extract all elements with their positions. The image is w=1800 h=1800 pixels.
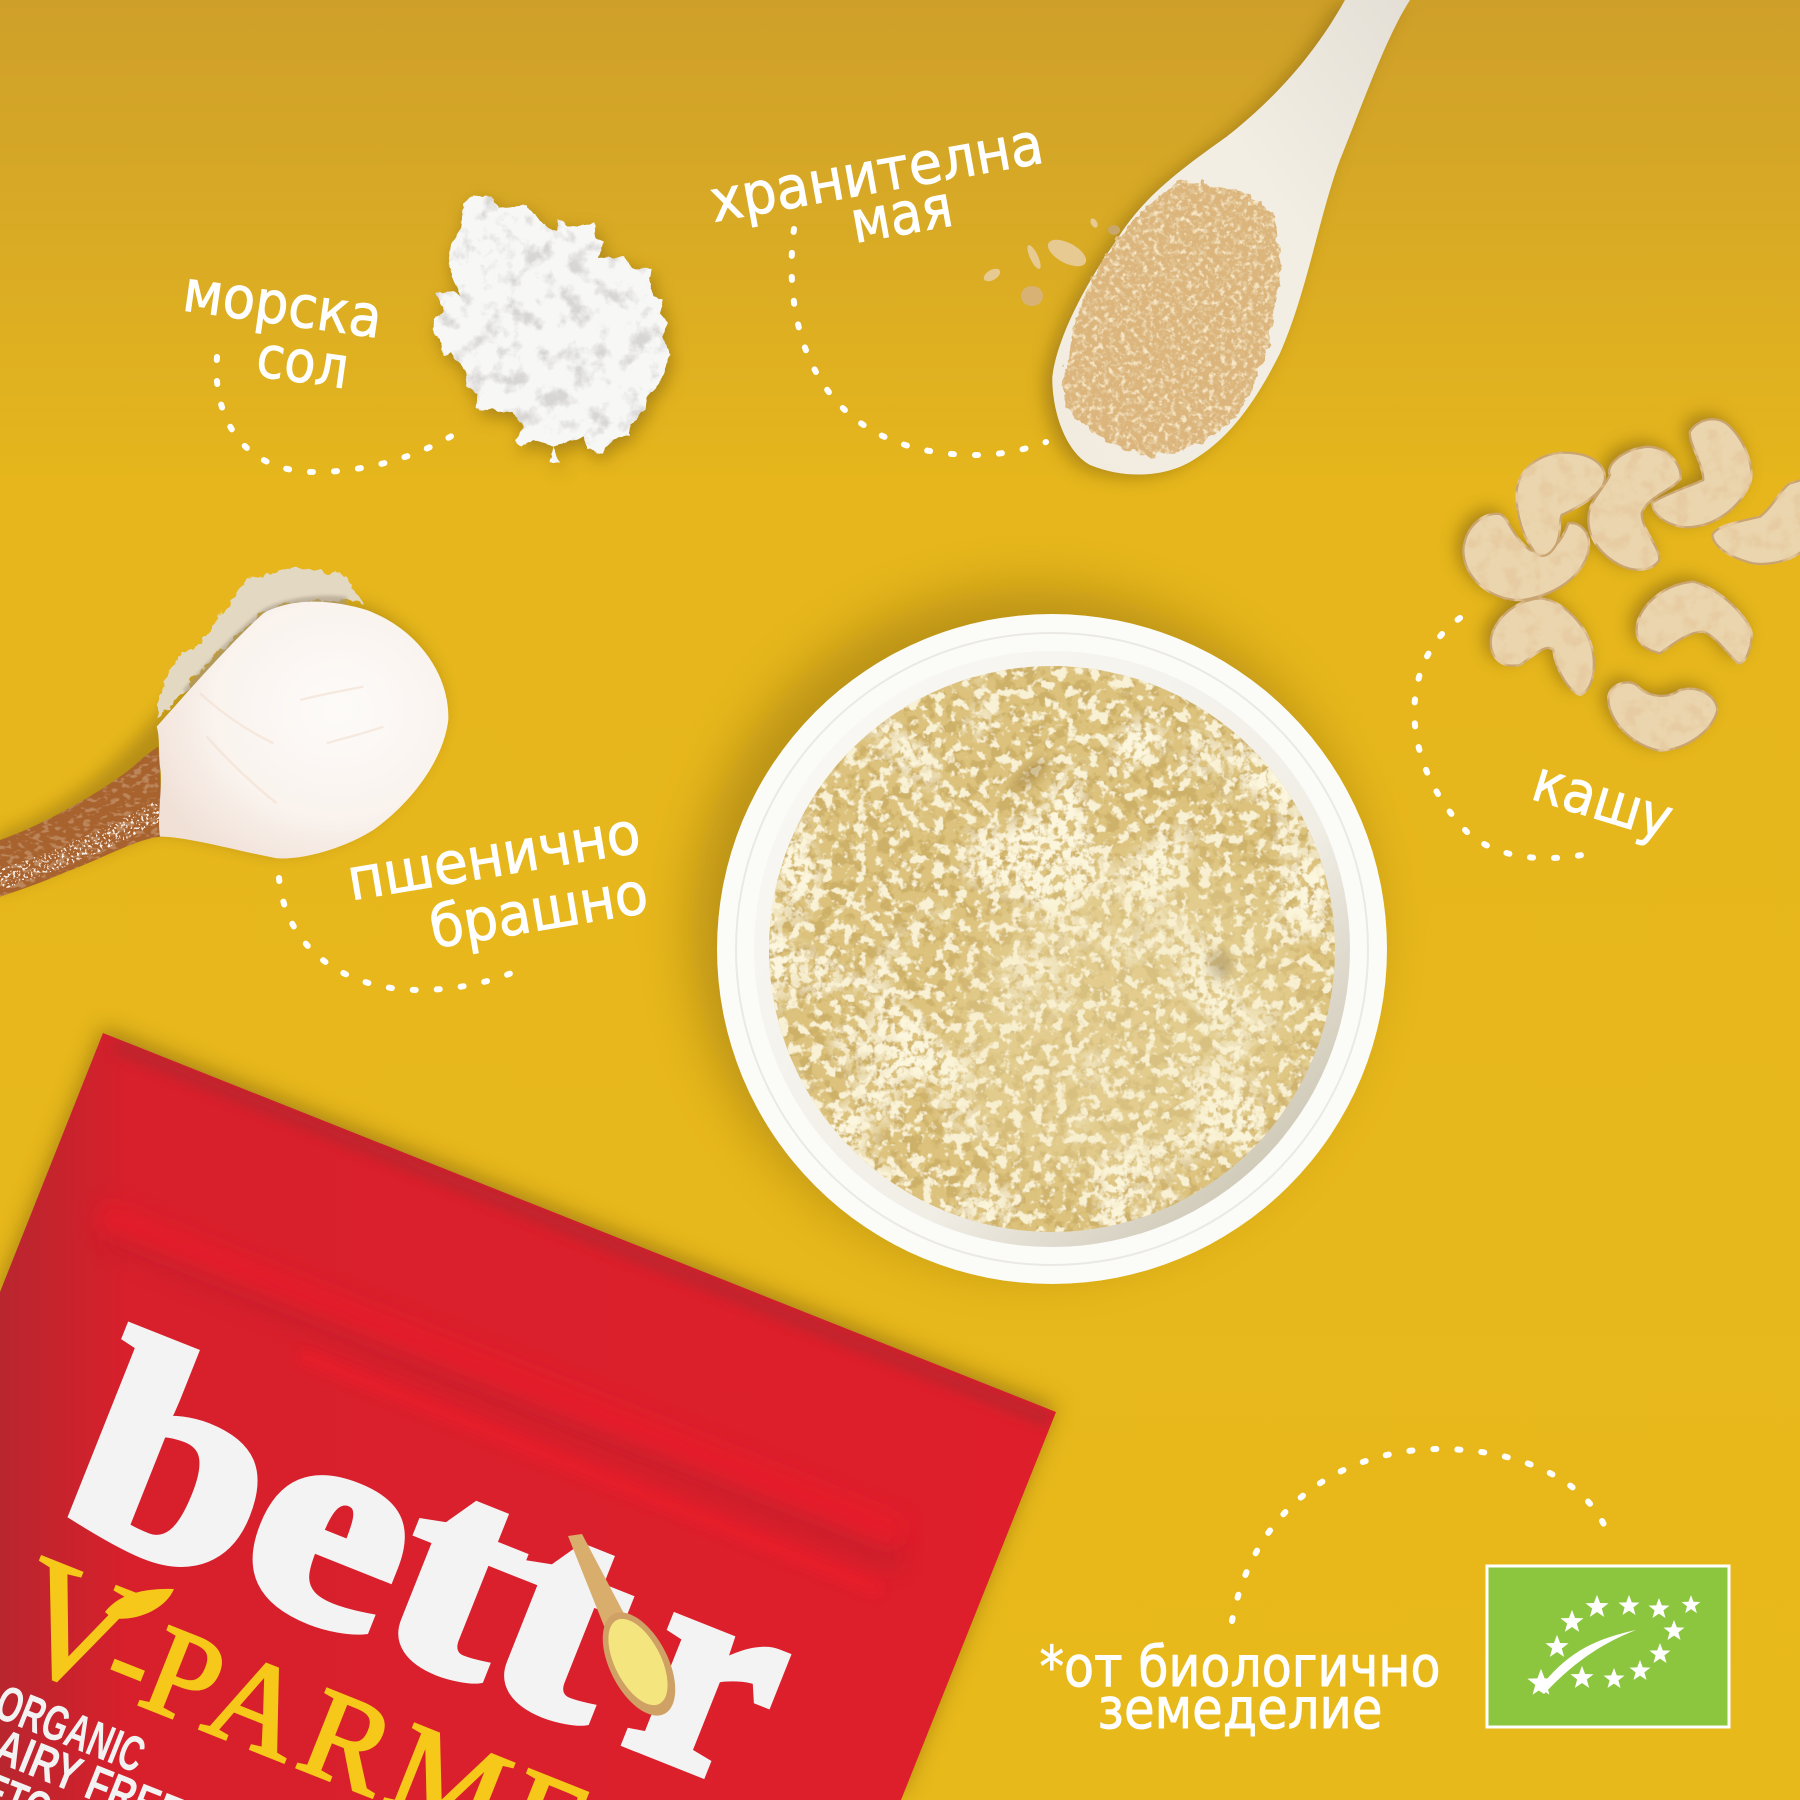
label: organic farming: земеделие	[1098, 1677, 1382, 1742]
label: wheat flour	[342, 798, 653, 962]
ingredient: cashews	[1457, 415, 1800, 751]
ingredient: sea salt	[433, 195, 673, 470]
label: wheat flour: пшенично	[342, 798, 645, 914]
ingredient: wheat flour spoon	[0, 569, 448, 897]
label: sea salt: сол	[252, 322, 353, 402]
label: organic farming	[1040, 1635, 1440, 1742]
dotted arc: organic	[1232, 1449, 1606, 1621]
yeast flakes	[982, 217, 1120, 306]
product name: V-Parmesan: -	[91, 1593, 173, 1725]
icon: EU organic leaf logo	[1487, 1566, 1729, 1727]
product name: V-Parmesan	[38, 1555, 590, 1800]
label: organic farming: *от биологично	[1040, 1635, 1440, 1700]
label: wheat flour: брашно	[425, 859, 653, 962]
brand logo: bett'r with spoon	[30, 1275, 835, 1800]
dotted arc: sea salt	[217, 357, 455, 472]
label: sea salt	[179, 257, 387, 402]
label: cashew: кашу	[1525, 747, 1681, 853]
label: nutritional yeast: хранителна	[705, 109, 1048, 236]
bowl of v-parmesan	[692, 588, 1387, 1284]
dotted arc: nutritional yeast	[792, 229, 1046, 455]
label: nutritional yeast: мая	[845, 172, 958, 257]
bowl contents	[769, 666, 1370, 1245]
dotted arc: cashew	[1414, 618, 1598, 858]
dotted arc: wheat flour	[279, 878, 525, 990]
product bag	[0, 1027, 1056, 1800]
label: sea salt: морска	[179, 257, 387, 352]
ingredient: nutritional yeast spoon	[982, 0, 1410, 478]
brand logo: bett'r with spoon: bett	[30, 1275, 682, 1785]
